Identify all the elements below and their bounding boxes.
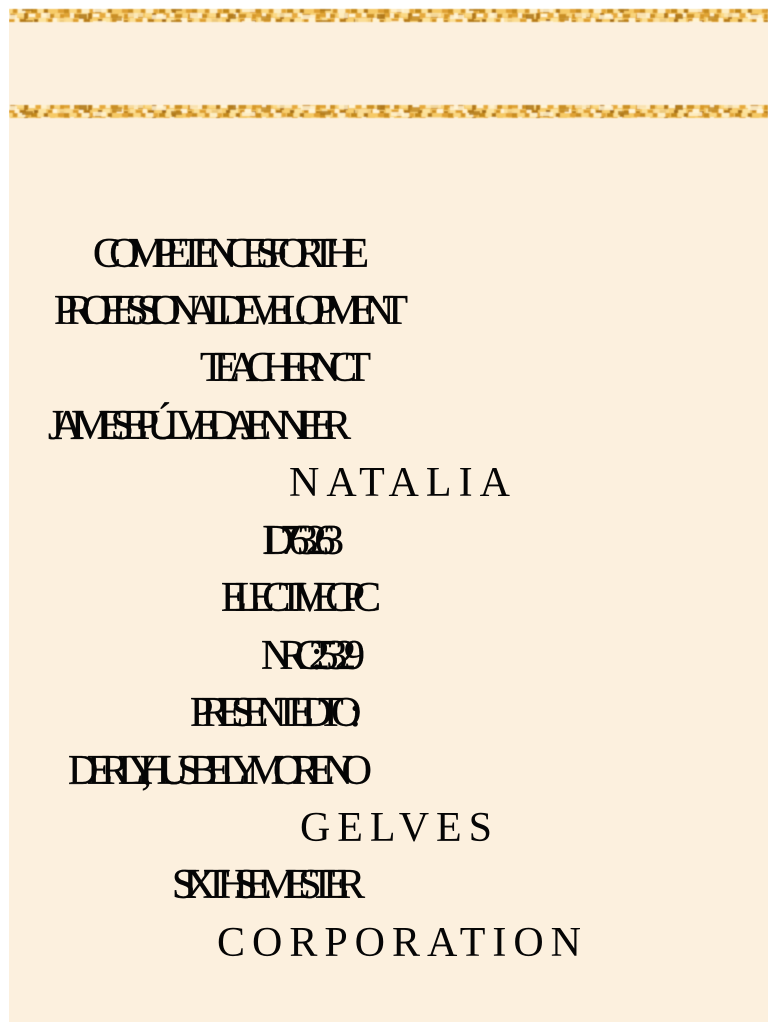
teacher name: DERLY, HUSBELY MORENO (68, 748, 372, 794)
student id: ID 763263 (262, 518, 344, 564)
institution: CORPORATION (217, 920, 581, 966)
gold glitter band: lower (9, 105, 768, 118)
title line 1: COMPETENCES FOR THE (93, 231, 369, 277)
gold glitter band: top (9, 9, 768, 22)
presented to: PRESENTED TO: (190, 690, 361, 736)
semester: SIXTH SEMESTER (172, 862, 365, 908)
author name: JAIME SEPÚLVEDA JENNIFER (48, 402, 351, 449)
teacher name continued: GELVES (300, 805, 492, 851)
course: ELECTIVE CPC (221, 575, 381, 621)
course number: NRC: 25329 (261, 633, 365, 679)
title line 3: TEACHER NCT (200, 345, 371, 391)
author name continued: NATALIA (289, 460, 511, 506)
title line 2: PROFESSIONAL DEVELOPMENT (54, 288, 408, 334)
